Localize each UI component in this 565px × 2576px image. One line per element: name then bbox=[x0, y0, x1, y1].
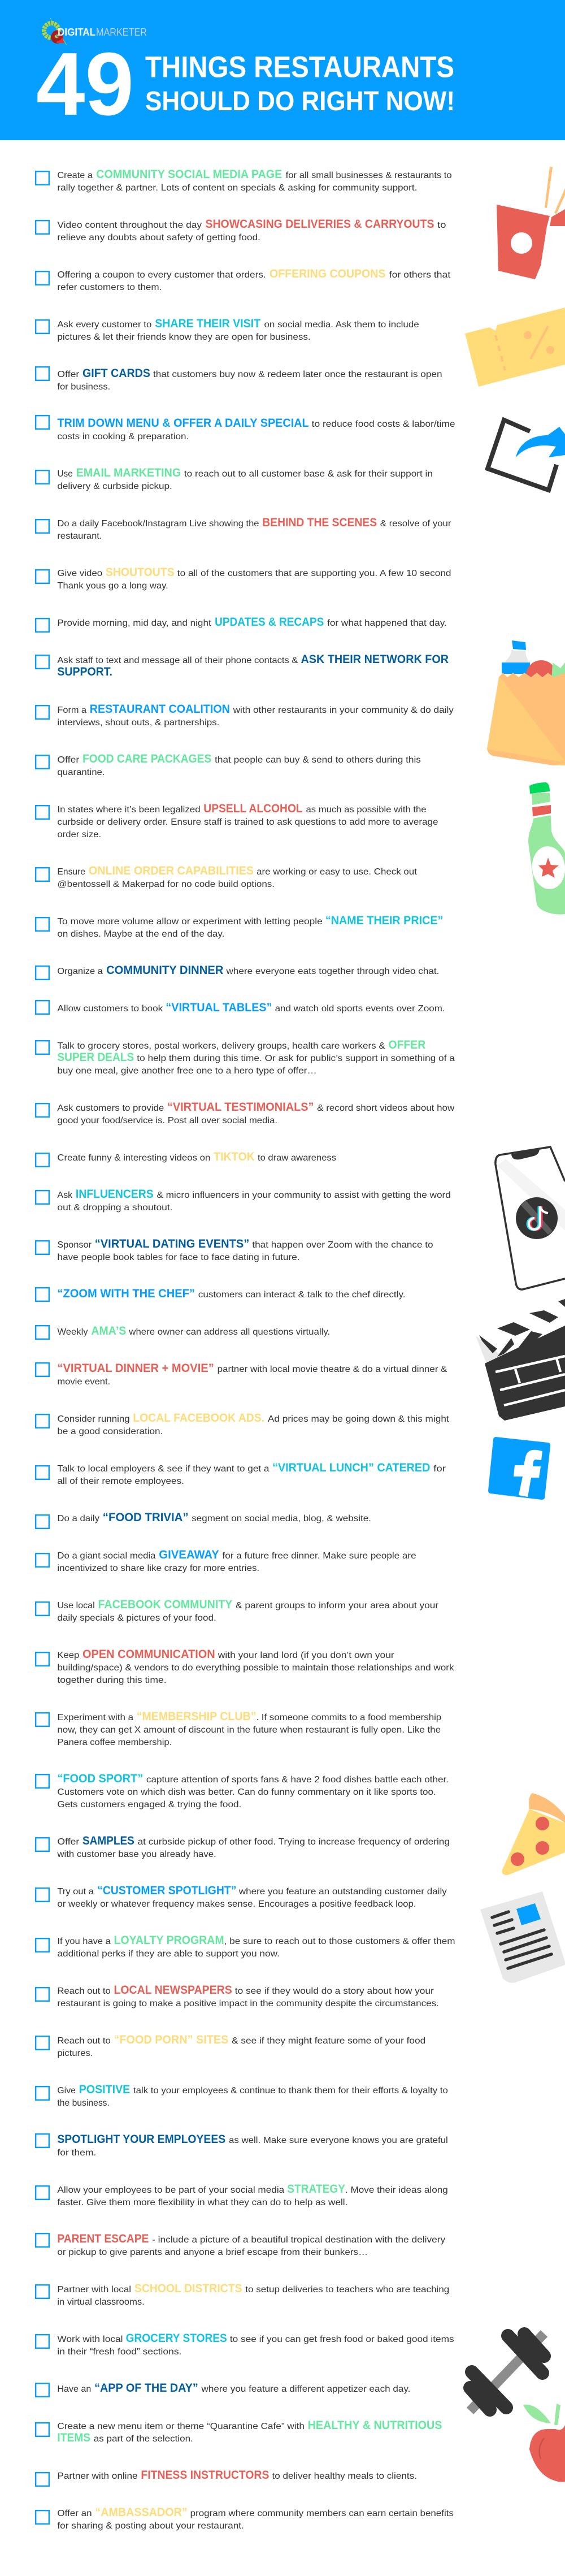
item 5: gift cards: Offer bbox=[57, 370, 80, 379]
logo: Digital Marketer: DIGITAL bbox=[58, 27, 95, 38]
item 22: influencers: INFLUENCERS bbox=[76, 1188, 154, 1201]
item 24: zoom with the chef bbox=[36, 1287, 405, 1301]
item 42: strategy: Allow your employees to be part of your social media bbox=[57, 2185, 284, 2195]
item 37: loyalty program: LOYALTY PROGRAM bbox=[114, 1934, 224, 1947]
item 25: AMAs: where owner can address all questions virtually. bbox=[128, 1327, 330, 1337]
item 47: healthy and nutritious items: HEALTHY & NUTRITIOUS bbox=[308, 2419, 442, 2432]
item 44: school districts: SCHOOL DISTRICTS bbox=[134, 2282, 242, 2295]
item 17: community dinner: Organize a bbox=[57, 967, 103, 976]
item 30: giveaway: for a future free dinner. Make sure people are bbox=[223, 1551, 416, 1561]
item 10: updates and recaps bbox=[36, 616, 447, 632]
item 42: strategy bbox=[36, 2183, 448, 2207]
item 6: trim down menu bbox=[36, 415, 455, 441]
item 38: local newspapers bbox=[36, 1984, 439, 2008]
item 17: community dinner bbox=[36, 964, 439, 980]
item 10: updates and recaps: UPDATES & RECAPS bbox=[215, 616, 324, 629]
item 37: loyalty program bbox=[36, 1934, 455, 1959]
item 7: email marketing: Use bbox=[57, 469, 73, 479]
item 2: showcasing deliveries: to bbox=[437, 220, 446, 230]
item 29: food trivia: “FOOD TRIVIA” bbox=[103, 1511, 189, 1524]
item 9: shoutouts: to all of the customers that are supporting you. A few 10 second bbox=[177, 569, 451, 578]
item 18: virtual tables: “VIRTUAL TABLES” bbox=[166, 1001, 272, 1014]
item 20: virtual testimonials: “VIRTUAL TESTIMONIALS” bbox=[167, 1101, 314, 1114]
item 33: membership club: Panera coffee membership. bbox=[57, 1738, 172, 1747]
item 19: offer super deals: buy one meal, give another free one to a hero type of offer… bbox=[57, 1066, 317, 1076]
item 14: upsell alcohol bbox=[36, 802, 438, 839]
item 9: shoutouts: Give video bbox=[57, 569, 102, 578]
item 33: membership club: now, they can get X amount of discount in the future when restaurant is fully open. Like the bbox=[57, 1725, 441, 1735]
item 27: local facebook ads: Consider running bbox=[57, 1414, 130, 1424]
item 44: school districts: to setup deliveries to teachers who are teaching bbox=[245, 2285, 449, 2294]
item 5: gift cards: for business. bbox=[57, 382, 110, 392]
logo: Digital Marketer: MARKETER bbox=[96, 27, 147, 38]
item 12: restaurant coalition: interviews, shout outs, & partnerships. bbox=[57, 718, 219, 728]
item 7: email marketing: EMAIL MARKETING bbox=[76, 466, 181, 479]
item 42: strategy: STRATEGY bbox=[287, 2183, 345, 2196]
header banner bbox=[0, 0, 565, 140]
item 23: virtual dating events: Sponsor bbox=[57, 1240, 92, 1250]
item 31: facebook community: daily specials & pictures of your food. bbox=[57, 1613, 216, 1623]
item 39: food porn sites: & see if they might feature some of your food bbox=[232, 2036, 425, 2046]
item 45: grocery stores: in their “fresh food” sections. bbox=[57, 2347, 181, 2357]
item 41: spotlight your employees: for them. bbox=[57, 2148, 96, 2158]
item 2: showcasing deliveries bbox=[36, 218, 446, 243]
icon: dumbbell bbox=[470, 2333, 544, 2411]
item 7: email marketing: to reach out to all customer base & ask for their support in bbox=[184, 469, 433, 479]
item 9: shoutouts: Thank yous go a long way. bbox=[57, 581, 168, 591]
item 8: behind the scenes: restaurant. bbox=[57, 531, 102, 541]
item 11: ask their network bbox=[36, 653, 449, 678]
item 14: upsell alcohol: In states where it’s been legalized bbox=[57, 805, 201, 815]
item 27: local facebook ads: Ad prices may be going down & this might bbox=[268, 1414, 449, 1424]
item 32: open communication: together during this time. bbox=[57, 1676, 167, 1685]
item 31: facebook community: FACEBOOK COMMUNITY bbox=[98, 1598, 232, 1611]
item 36: customer spotlight: where you feature an outstanding customer daily bbox=[238, 1887, 447, 1897]
item 18: virtual tables bbox=[36, 1001, 445, 1014]
item 36: customer spotlight bbox=[36, 1884, 447, 1909]
item 12: restaurant coalition: with other restaurants in your community & do daily bbox=[233, 705, 454, 715]
item 32: open communication: with your land lord (if you don’t own your bbox=[218, 1651, 394, 1660]
item 35: samples: with customer base you already have. bbox=[56, 1850, 216, 1859]
item 32: open communication: building/space) & vendors to do everything possible to maintain those relationships and work bbox=[57, 1663, 455, 1673]
item 34: food sport bbox=[36, 1772, 449, 1809]
item 48: fitness instructors: Partner with online bbox=[57, 2471, 138, 2481]
item 49: ambassador: “AMBASSADOR” bbox=[95, 2506, 188, 2519]
item 28: virtual lunch catered: “VIRTUAL LUNCH” CATERED bbox=[272, 1461, 430, 1474]
item 44: school districts: in virtual classrooms. bbox=[57, 2297, 145, 2307]
title line 2: SHOULD DO RIGHT NOW! bbox=[145, 86, 455, 116]
item 26: virtual dinner and movie: movie event. bbox=[57, 1377, 110, 1387]
item 14: upsell alcohol: UPSELL ALCOHOL bbox=[203, 802, 303, 815]
title number 49: 49 bbox=[36, 34, 134, 134]
item 4: share their visit: on social media. Ask them to include bbox=[264, 320, 419, 330]
item 42: strategy: . Move their ideas along bbox=[345, 2185, 448, 2195]
item 3: offering coupons: for others that bbox=[389, 270, 451, 280]
item 49: ambassador: program where community members can earn certain benefits bbox=[190, 2509, 454, 2518]
item 32: open communication bbox=[36, 1648, 455, 1685]
icon: film clapperboard bbox=[476, 1299, 565, 1421]
item 23: virtual dating events bbox=[36, 1237, 433, 1262]
item 21: tiktok: to draw awareness bbox=[258, 1153, 336, 1163]
item 8: behind the scenes: & resolve of your bbox=[380, 519, 451, 529]
item 1: community social media page: COMMUNITY SOCIAL MEDIA PAGE bbox=[96, 168, 282, 181]
item 40: positive: POSITIVE bbox=[79, 2083, 130, 2096]
item 4: share their visit: pictures & let their friends know they are open for business. bbox=[57, 332, 311, 342]
item 37: loyalty program: If you have a bbox=[57, 1937, 111, 1946]
item 27: local facebook ads: be a good consideration. bbox=[57, 1427, 163, 1436]
icon: takeout food box with chopsticks bbox=[497, 167, 565, 279]
item 1: community social media page: rally together & partner. Lots of content on specials & asking for community support. bbox=[57, 183, 417, 193]
logo: Digital Marketer bbox=[44, 18, 147, 45]
item 49: ambassador: Offer an bbox=[57, 2509, 92, 2518]
item 47: healthy and nutritious items: Create a new menu item or theme “Quarantine Cafe” with bbox=[57, 2422, 305, 2431]
item 46: app of the day: “APP OF THE DAY” bbox=[94, 2382, 198, 2395]
item 12: restaurant coalition: RESTAURANT COALITION bbox=[90, 703, 230, 716]
item 9: shoutouts bbox=[36, 566, 451, 591]
icon: coupon ticket bbox=[465, 308, 565, 387]
item 11: ask their network: Ask staff to text and message all of their phone contacts & bbox=[57, 656, 298, 665]
item 49: ambassador: for sharing & posting about your restaurant. bbox=[57, 2521, 244, 2531]
icon: Facebook logo bbox=[488, 1437, 550, 1500]
item 34: food sport: “FOOD SPORT” bbox=[57, 1772, 143, 1785]
item 4: share their visit bbox=[36, 317, 419, 342]
item 33: membership club: Experiment with a bbox=[57, 1713, 133, 1722]
item 44: school districts: Partner with local bbox=[57, 2285, 131, 2294]
item 29: food trivia: segment on social media, blog, & website. bbox=[192, 1514, 371, 1523]
item 12: restaurant coalition bbox=[36, 703, 454, 728]
item 39: food porn sites bbox=[36, 2033, 425, 2058]
item 30: giveaway: GIVEAWAY bbox=[159, 1548, 219, 1561]
item 47: healthy and nutritious items bbox=[36, 2419, 442, 2444]
item 13: food care packages bbox=[36, 752, 421, 777]
item 39: food porn sites: Reach out to bbox=[57, 2036, 111, 2046]
item 17: community dinner: COMMUNITY DINNER bbox=[106, 964, 223, 977]
item 31: facebook community bbox=[36, 1598, 439, 1623]
item 19: offer super deals: to help them during this time. Or ask for public’s support in something of a bbox=[137, 1054, 455, 1063]
item 41: spotlight your employees: SPOTLIGHT YOUR EMPLOYEES bbox=[57, 2133, 225, 2146]
item 8: behind the scenes: Do a daily Facebook/Instagram Live showing the bbox=[57, 519, 259, 529]
item 7: email marketing bbox=[36, 466, 433, 491]
item 33: membership club: “MEMBERSHIP CLUB” bbox=[137, 1710, 256, 1723]
item 8: behind the scenes: BEHIND THE SCENES bbox=[262, 516, 377, 529]
item 38: local newspapers: to see if they would do a story about how your bbox=[235, 1986, 434, 1996]
item 45: grocery stores bbox=[36, 2332, 454, 2357]
item 25: AMAs: AMA’S bbox=[91, 1324, 126, 1337]
item 26: virtual dinner and movie: partner with local movie theatre & do a virtual dinner & bbox=[218, 1365, 447, 1374]
item 24: zoom with the chef: customers can interact & talk to the chef directly. bbox=[198, 1290, 406, 1300]
item 1: community social media page: for all small businesses & restaurants to bbox=[286, 171, 452, 180]
item 15: online order capabilities: @bentossell & Makerpad for no code build options. bbox=[57, 880, 275, 889]
item 43: parent escape bbox=[36, 2232, 445, 2257]
item 4: share their visit: Ask every customer to bbox=[57, 320, 151, 330]
item 48: fitness instructors: FITNESS INSTRUCTORS bbox=[141, 2469, 269, 2482]
item 5: gift cards: GIFT CARDS bbox=[82, 367, 150, 380]
item 40: positive bbox=[36, 2083, 448, 2108]
item 40: positive: talk to your employees & continue to thank them for their efforts & loyalty to bbox=[133, 2086, 448, 2096]
item 40: positive: the business. bbox=[57, 2098, 110, 2108]
item 28: virtual lunch catered: Talk to local employers & see if they want to get a bbox=[57, 1464, 270, 1474]
item 20: virtual testimonials: & record short videos about how bbox=[317, 1103, 455, 1113]
item 27: local facebook ads bbox=[36, 1412, 449, 1436]
item 36: customer spotlight: Try out a bbox=[57, 1887, 94, 1897]
item 15: online order capabilities: are working or easy to use. Check out bbox=[257, 867, 417, 877]
item 47: healthy and nutritious items: ITEMS bbox=[57, 2431, 90, 2444]
item 2: showcasing deliveries: SHOWCASING DELIVERIES & CARRYOUTS bbox=[206, 218, 434, 231]
item 33: membership club: . If someone commits to a food membership bbox=[256, 1713, 441, 1722]
item 31: facebook community: & parent groups to inform your area about your bbox=[236, 1601, 439, 1610]
item 38: local newspapers: LOCAL NEWSPAPERS bbox=[114, 1984, 232, 1997]
item 26: virtual dinner and movie bbox=[36, 1362, 447, 1387]
item 29: food trivia: Do a daily bbox=[57, 1514, 99, 1523]
item 23: virtual dating events: have people book tables for face to face dating in future. bbox=[57, 1253, 300, 1262]
item 34: food sport: capture attention of sports fans & have 2 food dishes battle each other. bbox=[146, 1775, 449, 1785]
item 21: tiktok bbox=[36, 1150, 336, 1167]
item 9: shoutouts: SHOUTOUTS bbox=[106, 566, 175, 579]
item 46: app of the day: where you feature a different appetizer each day. bbox=[201, 2384, 410, 2394]
item 24: zoom with the chef: “ZOOM WITH THE CHEF” bbox=[57, 1287, 195, 1300]
item 14: upsell alcohol: as much as possible with the bbox=[306, 805, 427, 815]
item 28: virtual lunch catered: all of their remote employees. bbox=[57, 1477, 184, 1486]
item 17: community dinner: where everyone eats together through video chat. bbox=[225, 967, 439, 976]
item 36: customer spotlight: “CUSTOMER SPOTLIGHT” bbox=[97, 1884, 236, 1897]
item 1: community social media page: Create a bbox=[57, 171, 93, 180]
item 15: online order capabilities: Ensure bbox=[57, 867, 85, 877]
item 1: community social media page bbox=[36, 168, 452, 193]
item 20: virtual testimonials: good your food/service is. Post all over social media. bbox=[57, 1116, 277, 1125]
item 14: upsell alcohol: order size. bbox=[57, 830, 101, 839]
icon: newspaper bbox=[480, 1891, 565, 1983]
item 3: offering coupons bbox=[36, 267, 451, 292]
item 30: giveaway: Do a giant social media bbox=[57, 1551, 156, 1561]
item 21: tiktok: Create funny & interesting videos on bbox=[57, 1153, 210, 1163]
item 42: strategy: faster. Give them more flexibility in what they can do to help as well. bbox=[57, 2198, 347, 2207]
item 4: share their visit: SHARE THEIR VISIT bbox=[155, 317, 260, 330]
icon: share arrow bbox=[488, 420, 565, 490]
item 39: food porn sites: “FOOD PORN” SITES bbox=[114, 2033, 228, 2046]
item 11: ask their network: SUPPORT. bbox=[57, 665, 112, 678]
item 26: virtual dinner and movie: “VIRTUAL DINNER + MOVIE” bbox=[57, 1362, 214, 1375]
item 11: ask their network: ASK THEIR NETWORK FOR bbox=[301, 653, 449, 666]
icon: phone with TikTok logo bbox=[496, 1147, 565, 1289]
item 12: restaurant coalition: Form a bbox=[57, 705, 86, 715]
item 25: AMAs bbox=[36, 1324, 330, 1339]
item 23: virtual dating events: “VIRTUAL DATING EVENTS” bbox=[95, 1237, 249, 1250]
item 16: name their price: “NAME THEIR PRICE” bbox=[325, 914, 443, 927]
item 3: offering coupons: refer customers to them. bbox=[57, 283, 162, 292]
item 6: trim down menu: TRIM DOWN MENU & OFFER A DAILY SPECIAL bbox=[57, 417, 309, 430]
item 33: membership club bbox=[36, 1710, 441, 1747]
icon: apple bbox=[523, 2404, 565, 2482]
item 8: behind the scenes bbox=[36, 516, 451, 541]
item 32: open communication: Keep bbox=[57, 1651, 79, 1660]
item 22: influencers: Ask bbox=[57, 1190, 73, 1200]
item 16: name their price: on dishes. Maybe at the end of the day. bbox=[57, 929, 224, 939]
item 22: influencers: out & dropping a shoutout. bbox=[57, 1203, 173, 1213]
item 48: fitness instructors: to deliver healthy meals to clients. bbox=[272, 2471, 417, 2481]
item 34: food sport: Gets customers engaged & trying the food. bbox=[57, 1800, 241, 1809]
item 7: email marketing: delivery & curbside pickup. bbox=[57, 482, 172, 491]
icon: beer bottle bbox=[528, 782, 565, 915]
item 41: spotlight your employees bbox=[36, 2133, 448, 2158]
item 15: online order capabilities: ONLINE ORDER CAPABILITIES bbox=[89, 864, 254, 877]
item 15: online order capabilities bbox=[36, 864, 417, 889]
item 13: food care packages: quarantine. bbox=[57, 768, 105, 777]
item 20: virtual testimonials: Ask customers to provide bbox=[57, 1103, 164, 1113]
item 30: giveaway bbox=[36, 1548, 416, 1573]
item 16: name their price: To move more volume allow or experiment with letting people bbox=[57, 917, 323, 927]
item 38: local newspapers: Reach out to bbox=[57, 1986, 111, 1996]
item 46: app of the day bbox=[36, 2382, 410, 2397]
item 38: local newspapers: restaurant is going to make a positive impact in the community despite the circumstances. bbox=[57, 1999, 439, 2008]
item 10: updates and recaps: Provide morning, mid day, and night bbox=[57, 618, 211, 628]
item 19: offer super deals: OFFER bbox=[389, 1038, 425, 1051]
item 44: school districts bbox=[36, 2282, 449, 2307]
item 35: samples: at curbside pickup of other food. Trying to increase frequency of ordering bbox=[138, 1837, 450, 1847]
item 37: loyalty program: , be sure to reach out to those customers & offer them bbox=[224, 1937, 455, 1946]
item 16: name their price bbox=[36, 914, 443, 939]
item 35: samples: Offer bbox=[57, 1837, 80, 1847]
item 47: healthy and nutritious items: as part of the selection. bbox=[94, 2434, 193, 2444]
item 43: parent escape: - include a picture of a beautiful tropical destination with the delivery bbox=[152, 2235, 445, 2245]
item 23: virtual dating events: that happen over Zoom with the chance to bbox=[252, 1240, 433, 1250]
item 19: offer super deals: SUPER DEALS bbox=[57, 1051, 134, 1064]
item 18: virtual tables: and watch old sports events over Zoom. bbox=[275, 1004, 445, 1014]
item 13: food care packages: Offer bbox=[57, 755, 80, 765]
item 36: customer spotlight: or weekly or whatever frequency makes sense. Encourages a positive feedback loop. bbox=[57, 1899, 416, 1909]
item 22: influencers bbox=[36, 1188, 451, 1213]
item 10: updates and recaps: for what happened that day. bbox=[327, 618, 447, 628]
item 39: food porn sites: pictures. bbox=[57, 2049, 93, 2058]
item 3: offering coupons: Offering a coupon to every customer that orders. bbox=[57, 270, 266, 280]
item 2: showcasing deliveries: Video content throughout the day bbox=[57, 220, 202, 230]
item 3: offering coupons: OFFERING COUPONS bbox=[270, 267, 385, 280]
item 19: offer super deals: Talk to grocery stores, postal workers, delivery groups, health care workers & bbox=[57, 1041, 385, 1051]
item 18: virtual tables: Allow customers to book bbox=[57, 1004, 163, 1014]
item 32: open communication: OPEN COMMUNICATION bbox=[82, 1648, 215, 1661]
item 19: offer super deals bbox=[36, 1038, 455, 1076]
item 14: upsell alcohol: curbside or delivery order. Ensure staff is trained to ask questions to add more to average bbox=[57, 817, 438, 827]
item 35: samples bbox=[36, 1834, 450, 1859]
item 21: tiktok: TIKTOK bbox=[214, 1150, 255, 1163]
item 28: virtual lunch catered bbox=[36, 1461, 446, 1486]
item 6: trim down menu: costs in cooking & preparation. bbox=[57, 432, 189, 441]
item 13: food care packages: that people can buy & send to others during this bbox=[215, 755, 421, 765]
item 30: giveaway: incentivized to share like crazy for more entries. bbox=[57, 1564, 259, 1573]
item 20: virtual testimonials bbox=[36, 1101, 455, 1125]
item 22: influencers: & micro influencers in your community to assist with getting the word bbox=[157, 1190, 451, 1200]
item 35: samples: SAMPLES bbox=[82, 1834, 134, 1847]
icon: grocery bag bbox=[487, 640, 565, 765]
item 2: showcasing deliveries: relieve any doubts about safety of getting food. bbox=[57, 233, 260, 243]
item 45: grocery stores: GROCERY STORES bbox=[126, 2332, 227, 2345]
item 45: grocery stores: to see if you can get fresh food or baked good items bbox=[230, 2335, 454, 2344]
item 5: gift cards: that customers buy now & redeem later once the restaurant is open bbox=[153, 370, 442, 379]
item 41: spotlight your employees: as well. Make sure everyone knows you are grateful bbox=[229, 2136, 448, 2145]
item 46: app of the day: Have an bbox=[57, 2384, 91, 2394]
item 29: food trivia bbox=[36, 1511, 371, 1529]
title line 1: THINGS RESTAURANTS bbox=[145, 51, 454, 84]
item 28: virtual lunch catered: for bbox=[433, 1464, 446, 1474]
item 43: parent escape: PARENT ESCAPE bbox=[57, 2232, 149, 2245]
item 45: grocery stores: Work with local bbox=[57, 2335, 123, 2344]
item 25: AMAs: Weekly bbox=[57, 1327, 88, 1337]
item 40: positive: Give bbox=[57, 2086, 76, 2096]
item 37: loyalty program: additional perks if they are able to support you now. bbox=[57, 1949, 280, 1959]
item 6: trim down menu: to reduce food costs & labor/time bbox=[312, 419, 455, 429]
item 43: parent escape: or pickup to give parents and anyone a brief escape from their bunkers… bbox=[57, 2248, 368, 2257]
item 48: fitness instructors bbox=[36, 2469, 417, 2486]
item 31: facebook community: Use local bbox=[57, 1601, 95, 1610]
item 27: local facebook ads: LOCAL FACEBOOK ADS. bbox=[133, 1412, 264, 1425]
item 49: ambassador bbox=[36, 2506, 454, 2531]
icon: pizza slice bbox=[502, 1793, 565, 1875]
item 13: food care packages: FOOD CARE PACKAGES bbox=[82, 752, 211, 765]
item 5: gift cards bbox=[36, 367, 442, 392]
item 34: food sport: Customers vote on which dish was better. Can do funny commentary on it like sports too. bbox=[57, 1787, 436, 1797]
